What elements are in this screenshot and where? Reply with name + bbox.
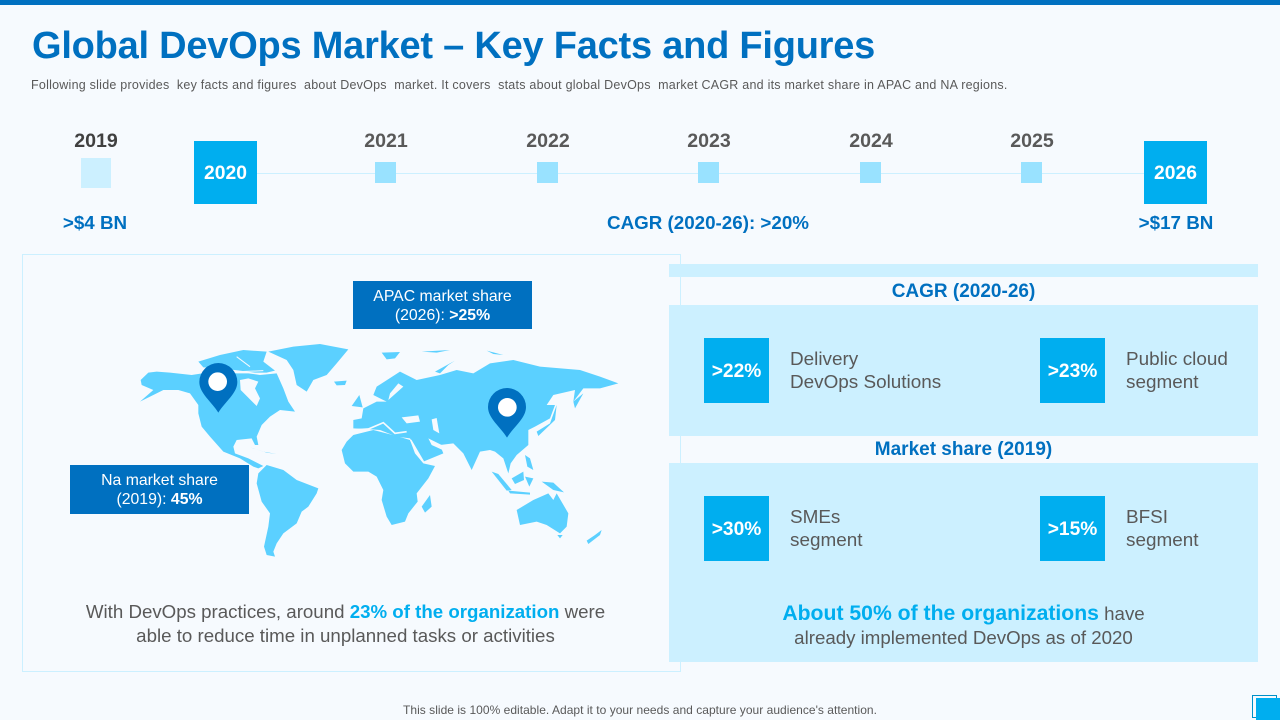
year 2026: 2026 (1154, 163, 1197, 184)
panel: world map (22, 254, 681, 672)
text: unplanned tasks statement (86, 601, 605, 646)
panel: market share (669, 463, 1258, 662)
marker 2019 (81, 158, 111, 188)
corner icon (1252, 695, 1280, 720)
label: SMEs (790, 507, 862, 551)
marker 2023 (698, 162, 719, 183)
stat: delivery solutions (704, 338, 769, 403)
year 2024: 2024 (849, 130, 893, 152)
heading: market share: Market share (2019) (875, 439, 1052, 460)
stat: SMEs (704, 496, 769, 561)
heading: CAGR: CAGR (2020-26) (892, 281, 1035, 302)
year 2023: 2023 (687, 130, 731, 152)
subtitle: Following slide provides key facts and figures about DevOps market. It covers stats about global DevOps market CAGR and its market share in APAC and NA regions. (31, 78, 1008, 92)
year 2021: 2021 (364, 130, 408, 152)
map pin: Asia (488, 388, 526, 438)
marker 2025 (1021, 162, 1042, 183)
stat: BFSI (1040, 496, 1105, 561)
label: public cloud: Public cloud (1126, 349, 1228, 370)
label: public cloud (1126, 349, 1228, 393)
callout: NA market share: (2019): 45% (116, 491, 203, 508)
label: delivery solutions (790, 349, 941, 393)
year 2020: 2020 (204, 163, 247, 184)
marker 2024 (860, 162, 881, 183)
North America mainland (140, 371, 295, 468)
stat: BFSI: >15% (1048, 519, 1097, 540)
callout: NA market share (70, 465, 249, 514)
label: SMEs: SMEs (790, 507, 840, 528)
top bar (0, 0, 1280, 5)
callout: APAC market share: (2026): >25% (395, 307, 490, 324)
label: SMEs: segment (790, 530, 862, 551)
marker 2022 (537, 162, 558, 183)
callout: NA market share: Na market share (101, 472, 218, 489)
text: unplanned tasks statement: able to reduce time in unplanned tasks or activities (136, 625, 555, 646)
label: BFSI: BFSI (1126, 507, 1168, 528)
world map (140, 344, 618, 557)
text: adoption statement: already implemented DevOps as of 2020 (794, 627, 1133, 648)
label: delivery solutions: Delivery (790, 349, 858, 370)
year 2020 (194, 141, 257, 204)
map pin: North America (199, 363, 237, 413)
value 2019: >$4 BN (63, 212, 127, 233)
label: BFSI: segment (1126, 530, 1198, 551)
footer note: This slide is 100% editable. Adapt it to your needs and capture your audience's attention. (403, 703, 877, 717)
strip: top decoration (669, 264, 1258, 277)
year 2019: 2019 (74, 130, 118, 152)
panel: CAGR (669, 305, 1258, 436)
label: delivery solutions: DevOps Solutions (790, 372, 941, 393)
year 2025: 2025 (1010, 130, 1054, 152)
callout: APAC market share: APAC market share (373, 288, 512, 305)
stat: public cloud (1040, 338, 1105, 403)
callout: APAC market share (353, 281, 532, 329)
title: Global DevOps Market – Key Facts and Figures (32, 25, 875, 67)
stat: public cloud: >23% (1048, 361, 1097, 382)
year 2026 (1144, 141, 1207, 204)
timeline (63, 130, 1213, 233)
stat: SMEs: >30% (712, 519, 761, 540)
label: BFSI (1126, 507, 1198, 551)
value 2026: >$17 BN (1139, 212, 1213, 233)
text: adoption statement: About 50% of the organizations have (782, 602, 1145, 625)
year 2022: 2022 (526, 130, 570, 152)
CAGR label: CAGR (2020-26): >20% (607, 212, 809, 233)
label: public cloud: segment (1126, 372, 1198, 393)
marker 2021 (375, 162, 396, 183)
stat: delivery solutions: >22% (712, 361, 761, 382)
text: adoption statement (782, 602, 1145, 648)
text: unplanned tasks statement: With DevOps practices, around 23% of the organization were (86, 601, 605, 622)
